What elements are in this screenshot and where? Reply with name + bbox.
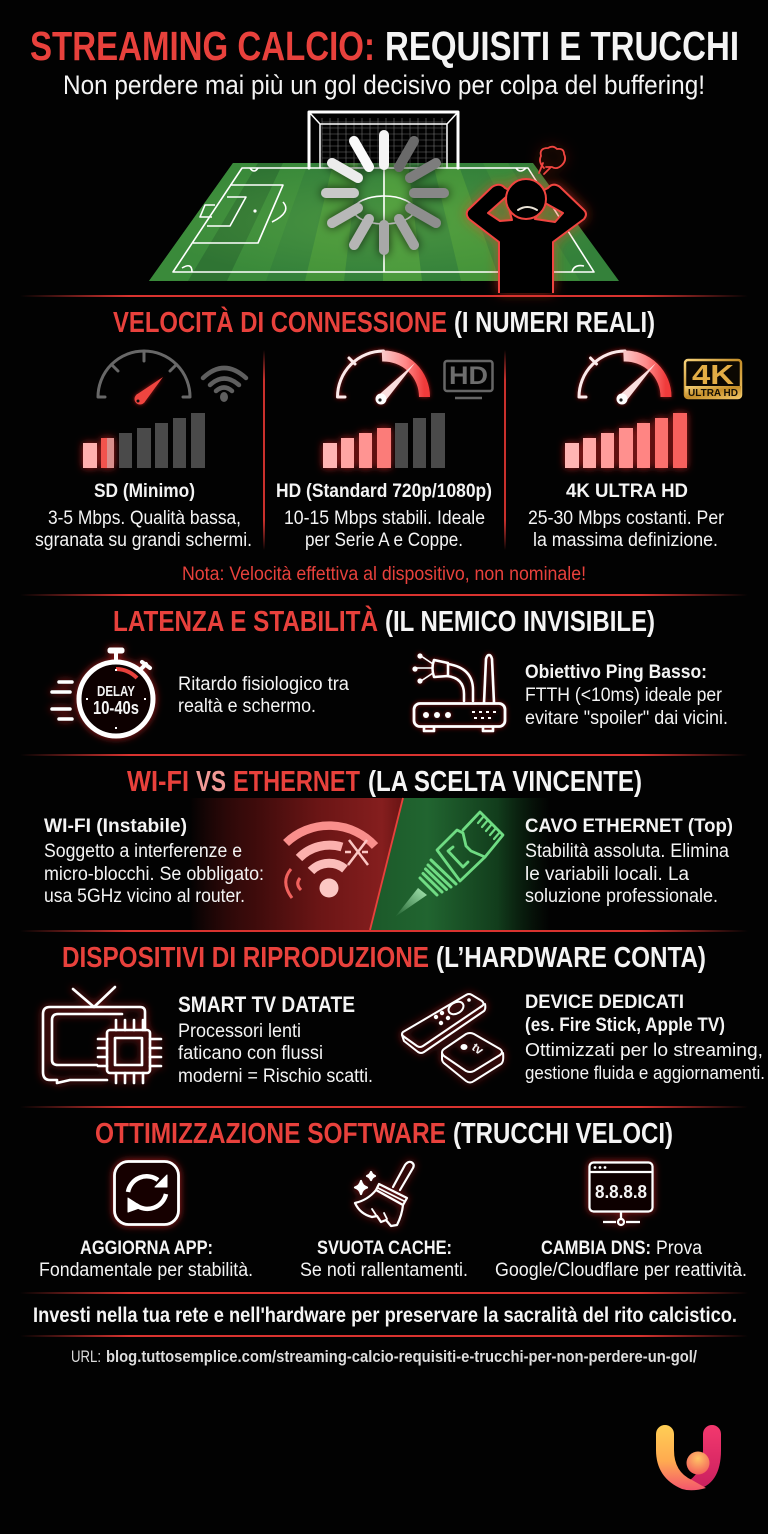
text: clear cache: Se noti rallentamenti. (300, 1260, 468, 1281)
text: ethernet: le variabili locali. La (525, 864, 689, 885)
panel: latency and stability (52, 604, 728, 736)
text: wi-fi: WI-FI (Instabile) (44, 816, 187, 837)
heading: (IL NEMICO INVISIBILE) (385, 606, 655, 638)
text: ethernet: soluzione professionale. (525, 886, 718, 907)
frustrated fan silhouette (467, 147, 586, 293)
icon: streaming remote and box (402, 994, 503, 1082)
heading: (TRUCCHI VELOCI) (453, 1118, 673, 1150)
text: ping (525, 662, 728, 729)
icon: old smart tv with chip (43, 987, 161, 1083)
divider (20, 754, 748, 756)
heading: WI-FI (127, 766, 189, 798)
icon: 4K gauge (579, 351, 666, 404)
text: ping: FTTH (<10ms) ideale per (525, 685, 723, 706)
text: wi-fi: Soggetto a interferenze e (44, 841, 242, 862)
text: smart tv: moderni = Rischio scatti. (178, 1066, 373, 1087)
column dividers (263, 350, 506, 550)
hero illustration: football pitch with buffering spinner (149, 112, 619, 293)
divider (20, 1292, 748, 1294)
pitch (149, 163, 619, 281)
text: update app (39, 1238, 253, 1281)
text: delay: Ritardo fisiologico tra (178, 674, 349, 695)
text: change DNS: CAMBIA DNS: (541, 1238, 651, 1259)
panel: software optimisation (39, 1118, 747, 1281)
text: SD: 3-5 Mbps. Qualità bassa, (48, 508, 241, 529)
icon: HD screen (444, 361, 492, 398)
text: 4K: 25-30 Mbps costanti. Per (528, 508, 725, 529)
text: SD (35, 481, 252, 551)
text: dedicated devices (525, 992, 765, 1083)
icon: stopwatch with delay: DELAY (97, 683, 135, 700)
heading: VELOCITÀ DI CONNESSIONE (113, 305, 447, 339)
heading: OTTIMIZZAZIONE SOFTWARE (95, 1118, 446, 1150)
icon: DNS window: 8.8.8.8 (595, 1182, 647, 1202)
logo (656, 1425, 721, 1490)
anger puff (539, 147, 565, 174)
icon: refresh (114, 1162, 178, 1224)
text: 4K (528, 481, 725, 551)
text: change DNS: Google/Cloudflare per reattività. (495, 1260, 747, 1281)
text: change DNS (495, 1238, 747, 1281)
text: SD: SD (Minimo) (94, 481, 195, 502)
text: HD: per Serie A e Coppe. (305, 530, 463, 551)
icon: stopwatch with delay (52, 648, 153, 736)
text: SD: sgranata su grandi schermi. (35, 530, 252, 551)
text: wi-fi: usa 5GHz vicino al router. (44, 886, 245, 907)
icon: 4K ultra HD badge: 4K (692, 359, 734, 390)
slanted separator (370, 798, 403, 930)
icon: streaming remote and box: tv (469, 1040, 486, 1058)
icon: HD screen: HD (449, 362, 488, 390)
heading (127, 766, 642, 798)
text: ethernet: Stabilità assoluta. Elimina (525, 841, 729, 862)
heading: DISPOSITIVI DI RIPRODUZIONE (62, 942, 429, 974)
text: clear cache: SVUOTA CACHE: (317, 1238, 452, 1259)
text: ping: evitare "spoiler" dai vicini. (525, 708, 728, 729)
loading spinner (326, 135, 444, 250)
text: 4K: 4K ULTRA HD (566, 481, 688, 502)
panel: connection speed (35, 305, 741, 585)
text: change DNS: Prova (656, 1238, 702, 1259)
source url: blog.tuttosemplice.com/streaming-calcio-requisiti-e-trucchi-per-non-perdere-un-gol/ (106, 1347, 697, 1366)
text: smart tv (178, 992, 373, 1087)
heading: LATENZA E STABILITÀ (113, 604, 378, 638)
title (30, 23, 739, 69)
icon: SD gauge (98, 351, 190, 404)
text: smart tv: Processori lenti (178, 1021, 301, 1042)
text: ping: Obiettivo Ping Basso: (525, 662, 707, 683)
note: Nota: Velocità effettiva al dispositivo, non nominale! (182, 564, 586, 585)
text: wi-fi: micro-blocchi. Se obbligato: (44, 864, 264, 885)
bar chart: SD signal (83, 413, 205, 468)
text: dedicated devices: DEVICE DEDICATI (525, 992, 684, 1013)
subtitle: Non perdere mai più un gol decisivo per colpa del buffering! (63, 70, 705, 100)
title: STREAMING CALCIO: (30, 23, 375, 69)
text: 4K: la massima definizione. (533, 530, 718, 551)
text: smart tv: faticano con flussi (178, 1043, 323, 1064)
text: HD (276, 481, 492, 551)
bar chart: 4K signal (565, 413, 687, 468)
icon: DNS window (590, 1162, 652, 1225)
heading: ETHERNET (233, 766, 360, 798)
heading (62, 942, 706, 974)
green ethernet background (370, 798, 550, 930)
divider (20, 295, 748, 297)
icon: 4K ultra HD badge: ULTRA HD (688, 388, 738, 399)
goal (309, 112, 458, 168)
heading: (I NUMERI REALI) (454, 307, 655, 339)
text: update app: AGGIORNA APP: (80, 1238, 213, 1259)
divider (20, 1106, 748, 1108)
red wi-fi background (190, 798, 403, 930)
text: clear cache (300, 1238, 468, 1281)
text: dedicated devices: (es. Fire Stick, Apple TV) (525, 1015, 725, 1036)
icon: stopwatch with delay: 10-40s (93, 698, 139, 718)
icon: HD gauge (338, 351, 425, 404)
icon: broken wi-fi (286, 826, 375, 898)
heading: (LA SCELTA VINCENTE) (368, 766, 642, 798)
heading: (L’HARDWARE CONTA) (436, 942, 706, 974)
icon: ethernet plug (395, 812, 503, 917)
heading (113, 604, 655, 638)
text: dedicated devices: Ottimizzati per lo streaming, (525, 1040, 763, 1060)
text: ethernet (525, 816, 733, 907)
text: ethernet: CAVO ETHERNET (Top) (525, 816, 733, 837)
text: HD: 10-15 Mbps stabili. Ideale (284, 508, 485, 529)
icon: broom (355, 1162, 414, 1226)
icon: wifi (203, 368, 246, 402)
source url: URL: (71, 1347, 101, 1366)
divider (20, 594, 748, 596)
heading: VS (196, 766, 226, 798)
divider (20, 1335, 748, 1337)
text: smart tv: SMART TV DATATE (178, 992, 355, 1017)
text: update app: Fondamentale per stabilità. (39, 1260, 253, 1281)
text: wi-fi (44, 816, 264, 907)
divider (20, 930, 748, 932)
text: delay (178, 674, 349, 717)
text: delay: realtà e schermo. (178, 696, 316, 717)
icon: 4K ultra HD badge (685, 359, 741, 399)
icon: router with fibre plug (412, 653, 505, 731)
panel: wi-fi vs ethernet (44, 766, 733, 930)
panel: playback devices (43, 942, 765, 1087)
bar chart: HD signal (323, 413, 445, 468)
text: HD: HD (Standard 720p/1080p) (276, 481, 492, 502)
